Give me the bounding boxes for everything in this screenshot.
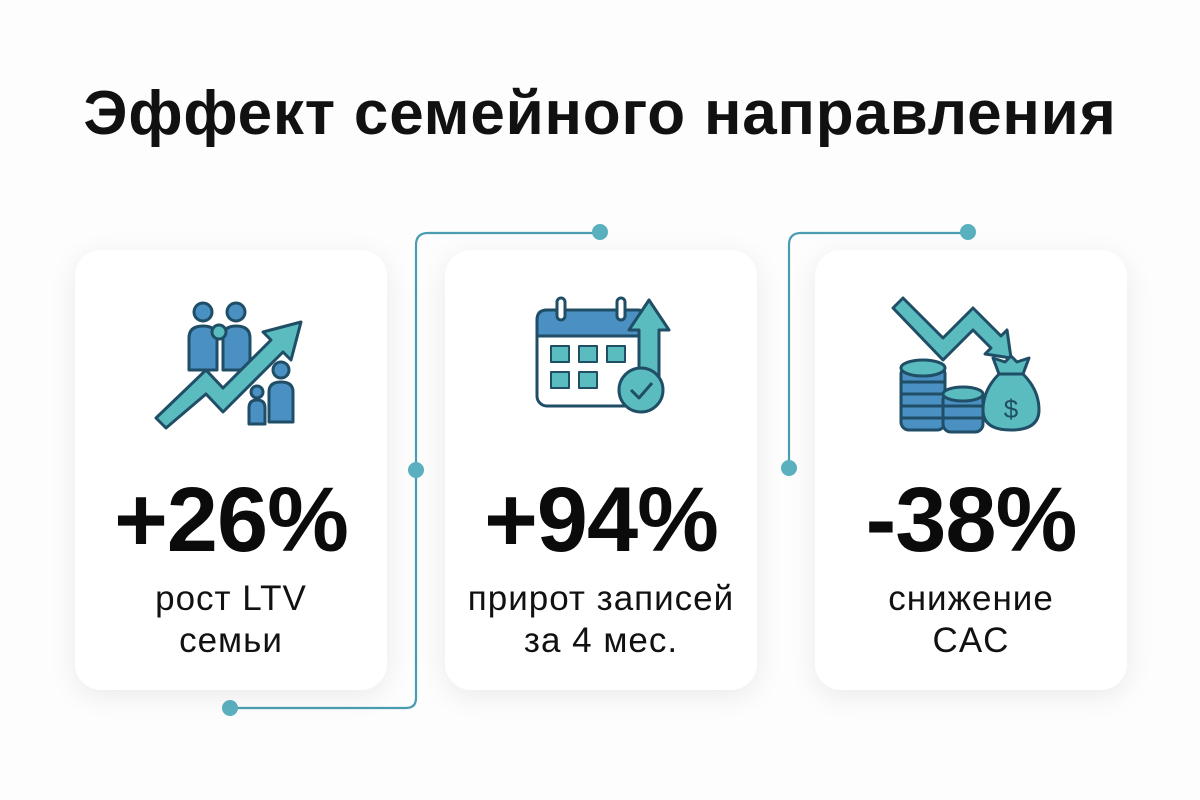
label: прирот записей [468,579,734,618]
stat: +94% [484,469,718,571]
panel: bookings [445,250,757,690]
label: семьи [179,621,283,660]
stat: +26% [114,469,348,571]
label [155,579,307,660]
title: Эффект семейного направления [83,79,1117,148]
label [888,579,1054,660]
panel: CAC [815,250,1127,690]
label: рост LTV [155,579,307,618]
icon: coins falling [891,296,1040,434]
icon: family growth [154,302,302,430]
label [468,579,734,660]
stat: -38% [866,469,1076,571]
label: снижение [888,579,1054,618]
icon: calendar [536,296,671,414]
icon: coins falling: $ [1004,394,1019,424]
label: CAC [933,621,1009,660]
panel: LTV [75,250,387,690]
label: за 4 мес. [524,621,678,660]
